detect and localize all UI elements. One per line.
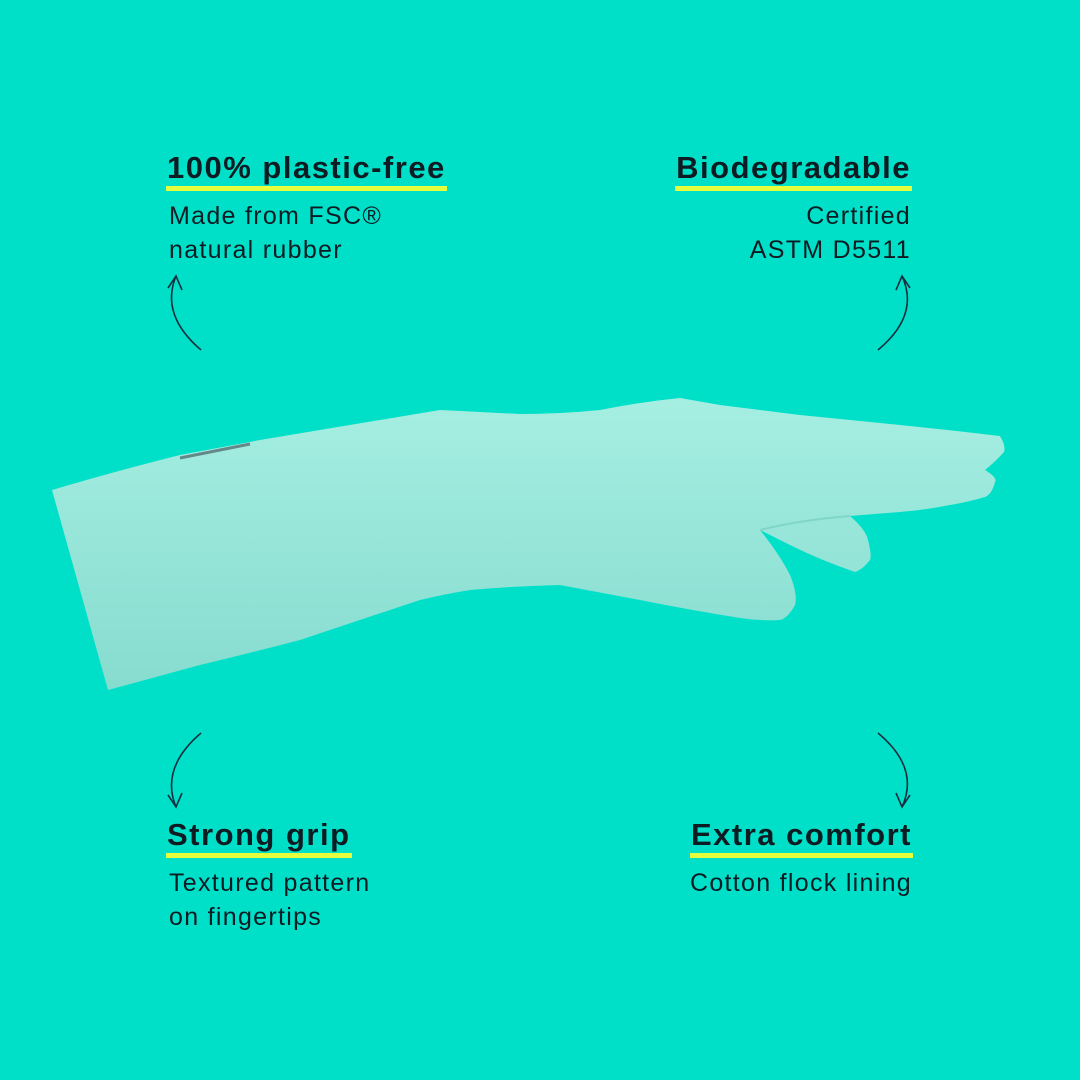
panel: extra comfort xyxy=(690,817,913,897)
panel: plastic-free xyxy=(166,150,447,264)
heading: Biodegradable xyxy=(676,150,911,185)
text: Made from FSC® xyxy=(169,202,382,230)
text xyxy=(169,202,382,264)
text: Certified xyxy=(806,202,911,230)
arrow: top-left xyxy=(168,276,201,350)
panel: biodegradable xyxy=(675,150,912,264)
text xyxy=(750,202,911,264)
arrow: bottom-left xyxy=(168,733,201,807)
text: Textured pattern xyxy=(169,869,370,897)
heading: 100% plastic-free xyxy=(167,150,446,185)
text: Cotton flock lining xyxy=(690,869,912,897)
text: on fingertips xyxy=(169,903,322,931)
heading: Strong grip xyxy=(167,817,351,852)
arrow: top-right xyxy=(878,276,910,350)
arrow: bottom-right xyxy=(878,733,910,807)
text xyxy=(169,869,370,931)
heading: Extra comfort xyxy=(691,817,912,852)
text: natural rubber xyxy=(169,236,343,264)
panel: strong grip xyxy=(166,817,370,931)
text: ASTM D5511 xyxy=(750,236,911,264)
